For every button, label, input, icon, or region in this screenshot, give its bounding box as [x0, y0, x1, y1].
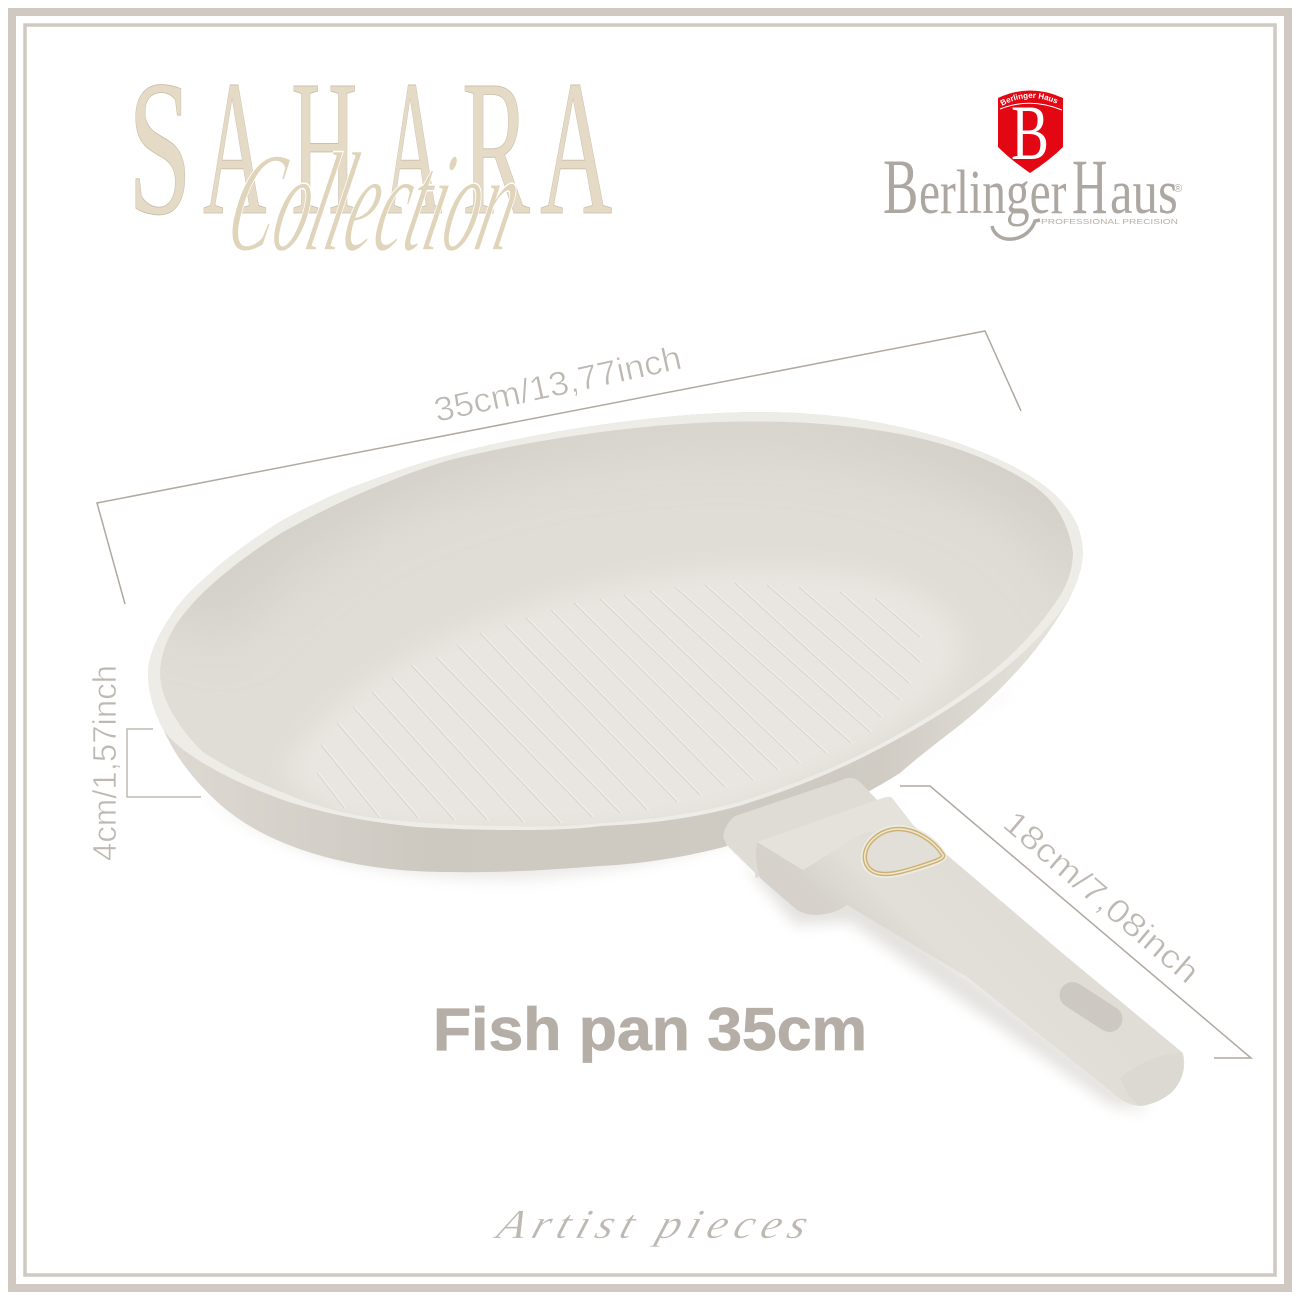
brand name: H [1072, 145, 1107, 231]
product name: Fish pan 35cm [433, 996, 867, 1063]
bracket line [97, 331, 1021, 604]
brand name [883, 145, 1178, 231]
wordmark: SAHARA: H [291, 40, 357, 255]
height bracket [127, 729, 201, 797]
icon: red shield: B [1011, 89, 1049, 176]
pan inner bowl [160, 422, 1073, 826]
pan outer body [148, 412, 1082, 872]
hanging hole [1055, 977, 1127, 1037]
bracket plate [723, 778, 880, 878]
bracket shadow on pan [728, 776, 860, 826]
pan rim [148, 412, 1083, 830]
bowl upper shading [186, 422, 1073, 619]
dimension: pan height [86, 665, 201, 861]
length label: 35cm/13,77inch [431, 339, 685, 430]
icon: red shield [998, 89, 1063, 176]
dimension: pan length [97, 331, 1021, 604]
fish pan [130, 400, 1100, 872]
handle body [756, 797, 1184, 1106]
brand logo: Berlinger Haus [883, 89, 1182, 241]
handle assembly [723, 776, 1184, 1106]
title: Sahara Collection [128, 40, 612, 281]
pan floor [285, 567, 961, 831]
script: Collection: Collection [214, 123, 537, 281]
handle end cap [1120, 1053, 1183, 1106]
grill ridges highlight [319, 583, 922, 823]
handle top facet [757, 797, 913, 870]
brand name: aus [1110, 158, 1178, 227]
tagline: PROFESSIONAL PRECISION [1041, 219, 1178, 226]
wordmark: SAHARA: S [128, 41, 192, 256]
dimension: handle length [900, 786, 1251, 1058]
wordmark: SAHARA [128, 40, 612, 256]
pan shadow [200, 650, 1040, 880]
wordmark: SAHARA: A [383, 41, 442, 256]
bracket white edge [725, 842, 755, 878]
handle length label: 18cm/7,08inch [996, 803, 1207, 990]
wordmark: SAHARA: A [540, 41, 612, 256]
wordmark: SAHARA: R [462, 40, 530, 256]
icon: red shield: Berlinger Haus [1000, 93, 1058, 106]
height label: 4cm/1,57inch [86, 665, 123, 861]
gold release button [861, 825, 947, 878]
brand name: erlinger [919, 158, 1066, 226]
handle shadow [745, 865, 1150, 1112]
brand name: B [883, 145, 918, 231]
wordmark: SAHARA: A [203, 40, 267, 256]
bracket line [900, 786, 1251, 1058]
g swash [992, 220, 1040, 239]
registered mark: ® [1174, 183, 1182, 195]
grill ridges [317, 583, 920, 823]
footer script: Artist pieces: Artist pieces [489, 1202, 814, 1247]
